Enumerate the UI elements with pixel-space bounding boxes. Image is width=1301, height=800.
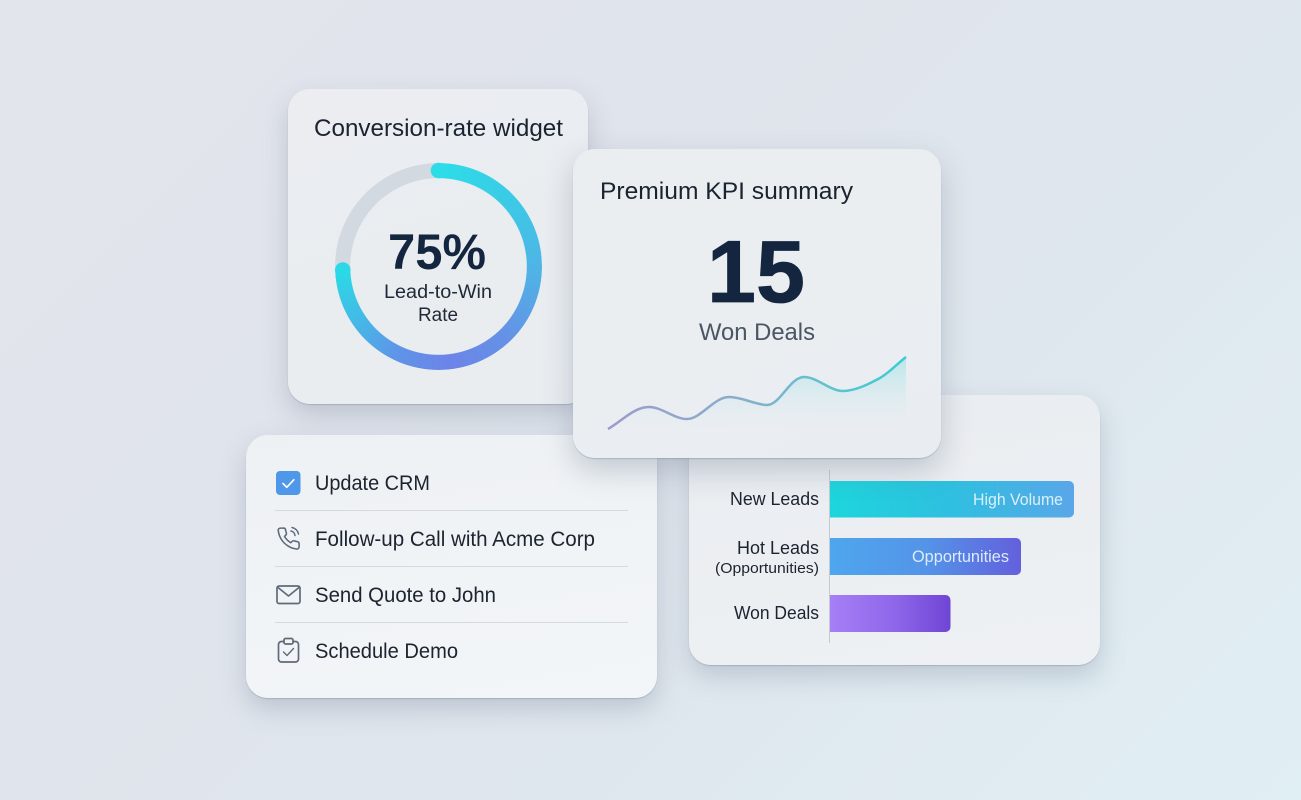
donut arc start cap bbox=[431, 163, 446, 178]
task: schedule demo: Schedule Demo bbox=[315, 640, 458, 663]
label line two: Rate bbox=[418, 305, 458, 326]
heading: Premium KPI summary bbox=[600, 178, 854, 205]
panel: conversion-rate widget bbox=[288, 89, 588, 404]
panel: task list bbox=[246, 435, 657, 698]
task rows bbox=[275, 471, 628, 663]
label: hot leads: Hot Leads bbox=[737, 538, 819, 558]
task: send quote: Send Quote to John bbox=[315, 584, 496, 607]
icon: clipboard bbox=[278, 638, 298, 662]
donut arc end cap bbox=[335, 262, 351, 278]
bar: new leads: High Volume bbox=[973, 491, 1063, 509]
KPI content bbox=[600, 178, 907, 430]
panel: premium KPI summary bbox=[573, 149, 941, 458]
icon: phone bbox=[278, 528, 299, 549]
label: won deals: Won Deals bbox=[734, 603, 819, 623]
label: won deals: Won Deals bbox=[699, 319, 815, 346]
label: opportunities: (Opportunities) bbox=[715, 560, 819, 577]
bar: hot leads bbox=[830, 538, 1021, 575]
sparkline bbox=[608, 357, 906, 432]
icon: checked box bbox=[276, 471, 300, 495]
bar: hot leads: Opportunities bbox=[912, 548, 1009, 566]
value: 75%: 75% bbox=[388, 224, 486, 280]
funnel chart bbox=[715, 470, 1074, 643]
donut labels and title bbox=[314, 115, 563, 326]
bar: new leads bbox=[830, 481, 1074, 518]
label line one: Lead-to-Win bbox=[384, 282, 492, 303]
heading: Conversion-rate widget bbox=[314, 115, 563, 142]
task: follow-up call: Follow-up Call with Acme Corp bbox=[315, 528, 595, 551]
panel: funnel bar chart bbox=[689, 395, 1100, 665]
icon: envelope bbox=[277, 586, 300, 604]
task: update CRM: Update CRM bbox=[315, 472, 430, 495]
axis line bbox=[829, 470, 830, 643]
donut chart: 75% lead-to-win bbox=[335, 163, 542, 370]
label: new leads: New Leads bbox=[730, 489, 819, 509]
value: 15: 15 bbox=[707, 222, 805, 321]
bar: won deals bbox=[830, 595, 950, 632]
